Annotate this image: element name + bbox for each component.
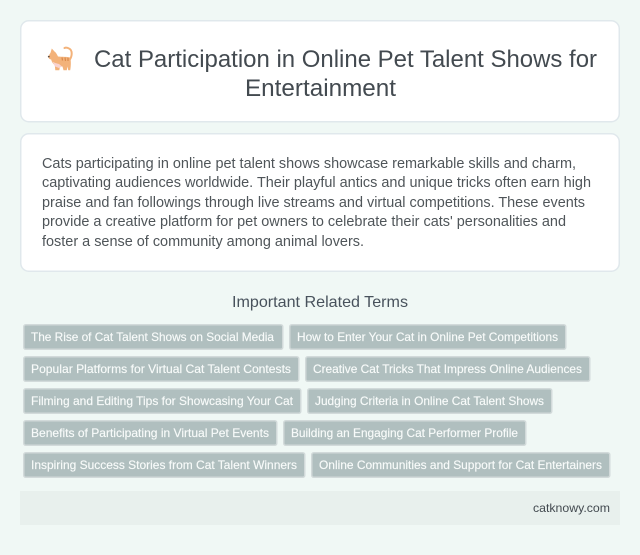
tag: filming and editing: Filming and Editing Tips for Showcasing Your Cat <box>31 394 294 408</box>
footer <box>20 491 620 525</box>
title: Entertainment <box>245 75 396 102</box>
tag: success stories: Inspiring Success Stories from Cat Talent Winners <box>31 458 297 472</box>
footer: catknowy.com <box>533 501 610 515</box>
tag: performer profile: Building an Engaging Cat Performer Profile <box>291 426 518 440</box>
tag: judging criteria <box>308 389 552 413</box>
tag: rise of cat talent shows: The Rise of Cat Talent Shows on Social Media <box>31 330 274 344</box>
tag: online communities <box>312 453 610 477</box>
tag: benefits <box>24 421 277 445</box>
tag: rise of cat talent shows <box>24 325 283 349</box>
text block: description: provide a creative platform for pet owners to celebrate their cats' personalities and <box>42 214 566 230</box>
tag: creative tricks <box>306 357 590 381</box>
title <box>94 46 597 102</box>
tag: performer profile <box>284 421 526 445</box>
tag: online communities: Online Communities and Support for Cat Entertainers <box>319 458 602 472</box>
heading: related terms: Important Related Terms <box>232 294 408 311</box>
panel: description card <box>21 134 619 271</box>
text block: description: Cats participating in online pet talent shows showcase remarkable skills and charm, <box>42 156 576 172</box>
tag: creative tricks: Creative Cat Tricks That Impress Online Audiences <box>313 362 582 376</box>
text block: description <box>42 156 591 250</box>
tag: success stories <box>24 453 305 477</box>
tag: judging criteria: Judging Criteria in Online Cat Talent Shows <box>315 394 544 408</box>
text block: description: praise and fan followings through live streams and virtual competitions. These events <box>42 195 585 211</box>
icon: cat <box>48 48 72 70</box>
panel: header card <box>21 21 619 122</box>
panel: term tags <box>24 325 610 477</box>
title: Cat Participation in Online Pet Talent Shows for <box>94 46 597 73</box>
tag: popular platforms <box>24 357 299 381</box>
tag: how to enter <box>290 325 566 349</box>
tag: how to enter: How to Enter Your Cat in Online Pet Competitions <box>297 330 558 344</box>
text block: description: captivating audiences worldwide. Their playful antics and unique tricks often earn high <box>42 175 591 191</box>
tag: filming and editing <box>24 389 301 413</box>
tag: popular platforms: Popular Platforms for Virtual Cat Talent Contests <box>31 362 291 376</box>
text block: description: foster a sense of community among animal lovers. <box>42 234 364 250</box>
tag: benefits: Benefits of Participating in Virtual Pet Events <box>31 426 269 440</box>
